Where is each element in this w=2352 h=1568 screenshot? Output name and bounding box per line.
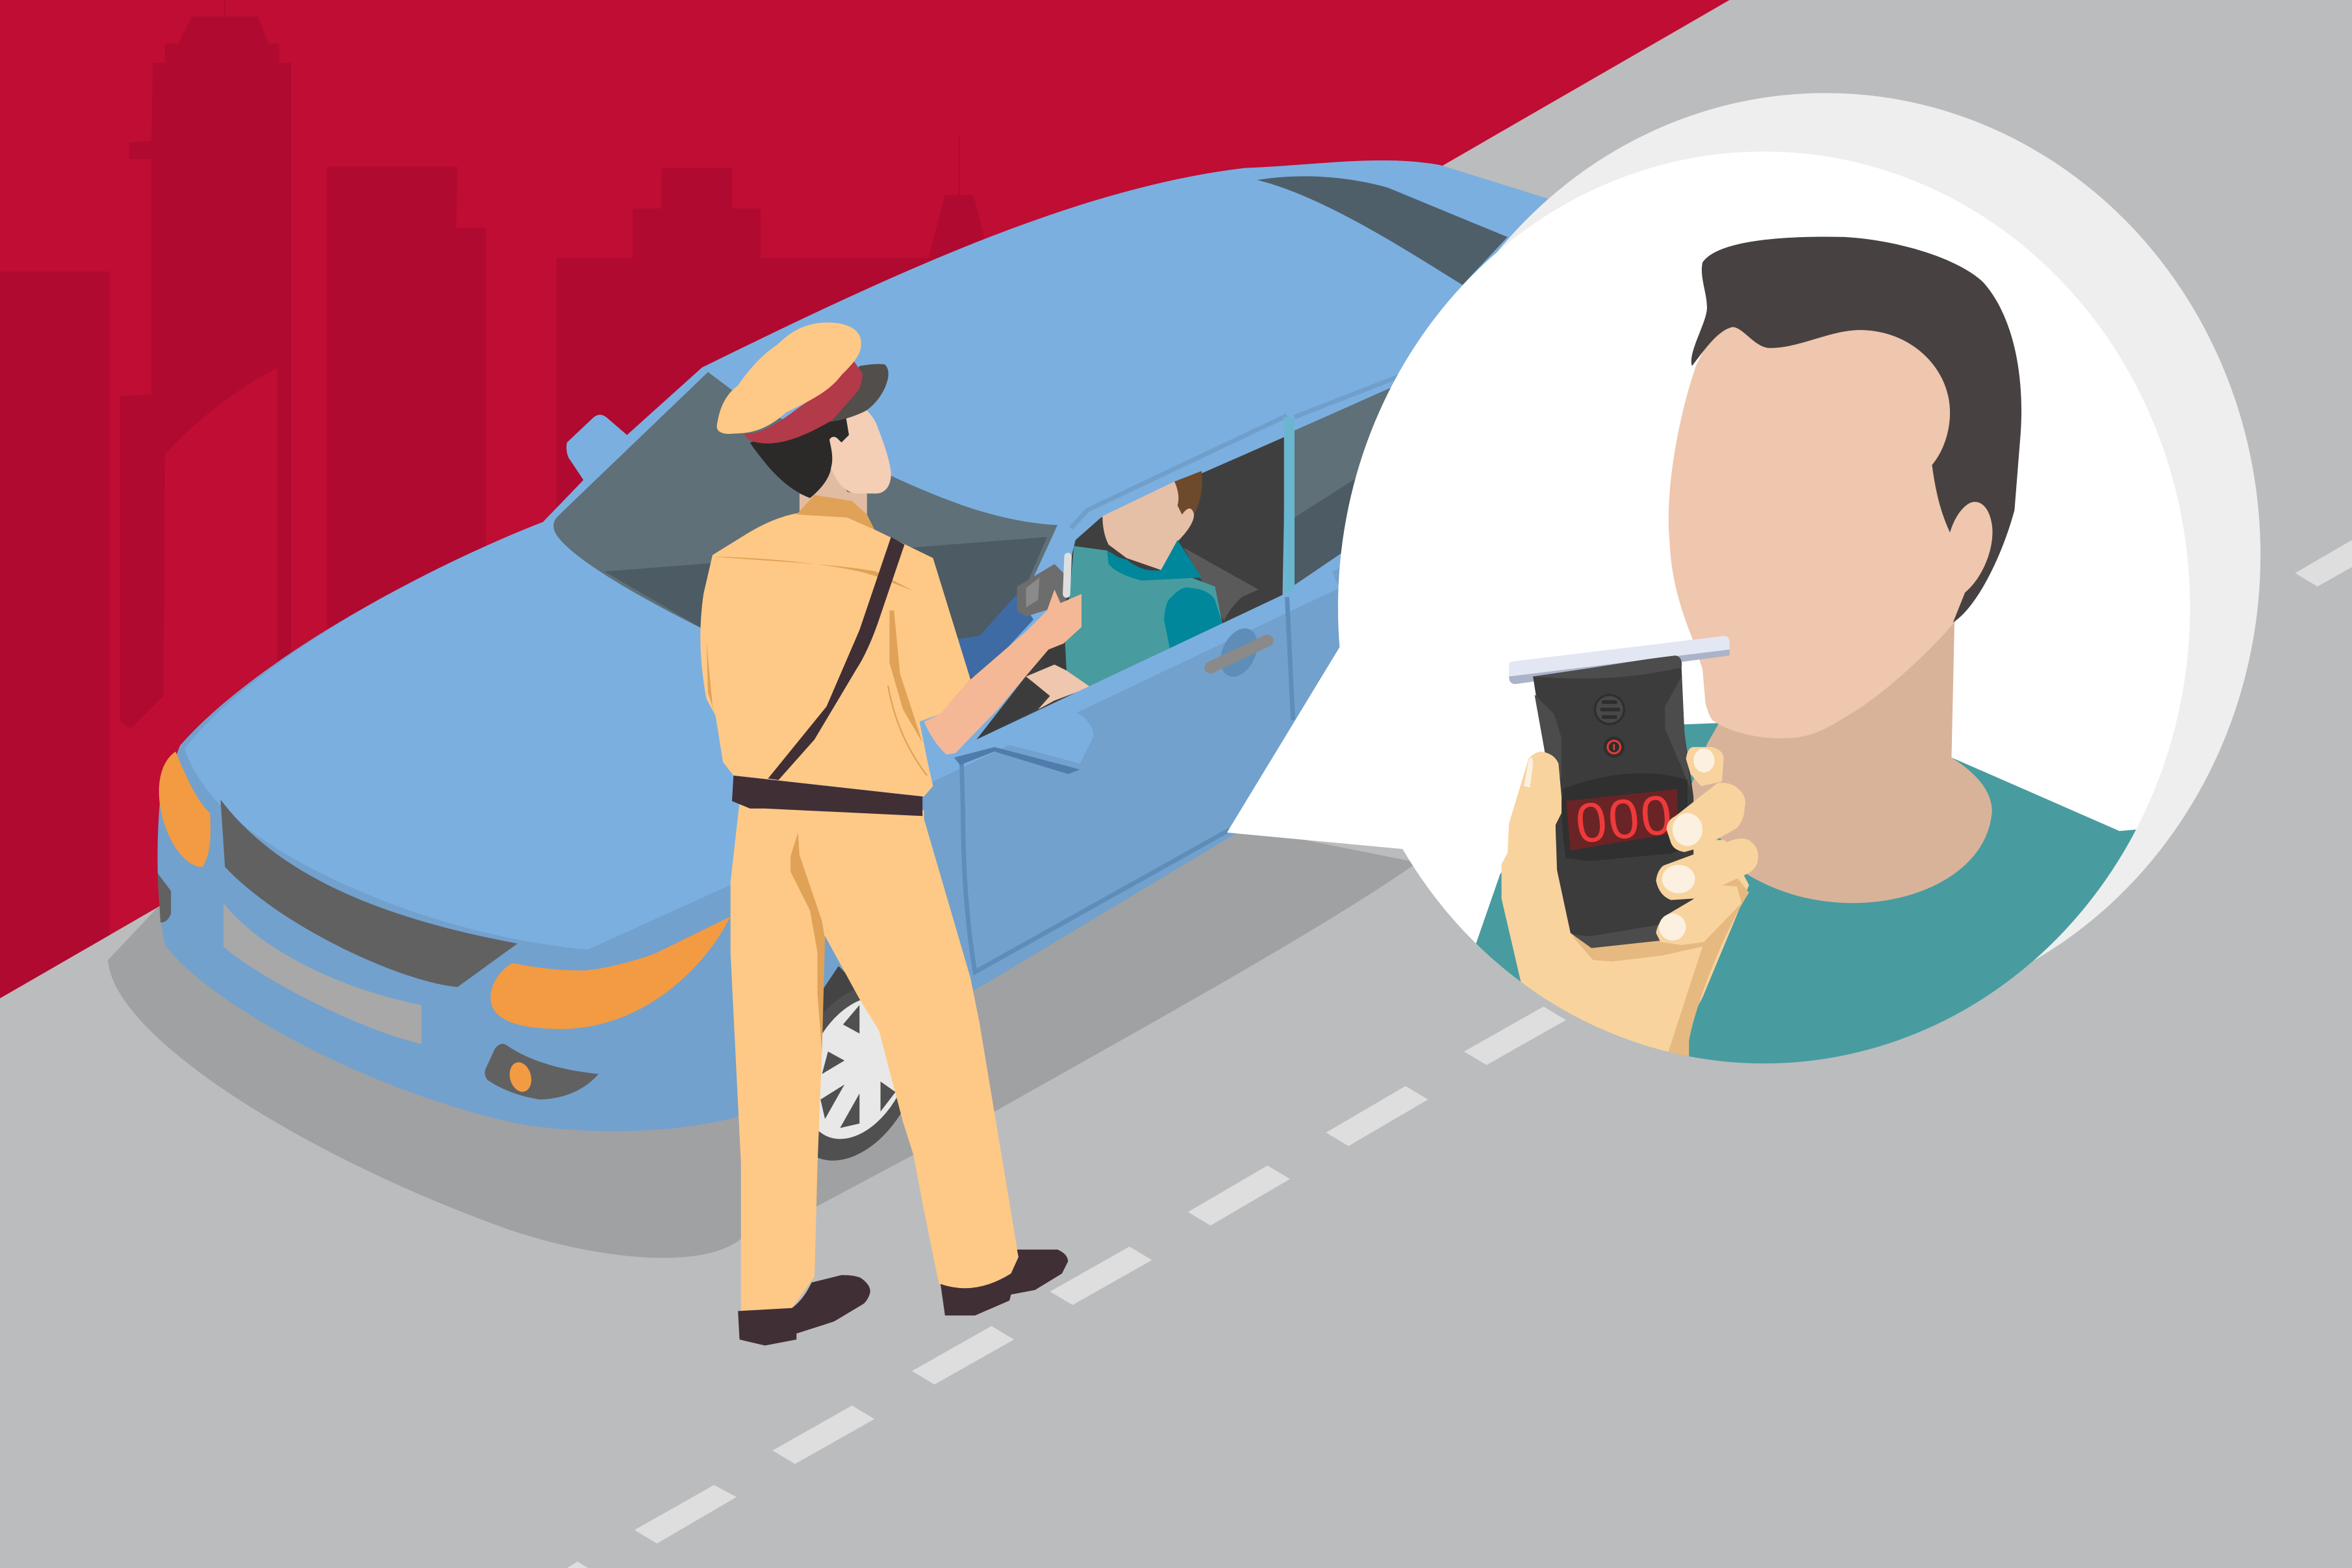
window pillar <box>1284 417 1295 600</box>
window sill strip <box>924 572 1339 786</box>
driver hand <box>1026 664 1091 709</box>
breathalyser <box>1533 655 1693 948</box>
skyline buildings <box>0 0 987 1022</box>
device side grips <box>1533 655 1691 789</box>
face <box>1669 307 2010 739</box>
display reading: 000 <box>1573 784 1675 855</box>
blue car <box>157 160 1560 1182</box>
officer face <box>829 408 891 494</box>
side marker <box>157 873 171 922</box>
shirt collar <box>796 495 874 529</box>
left headlight <box>159 752 210 867</box>
neck <box>800 468 867 518</box>
left shoe <box>738 1275 870 1345</box>
shoulder strap <box>768 537 905 780</box>
belt <box>732 776 922 816</box>
number plate <box>223 903 422 1044</box>
car interior blue <box>957 594 1033 677</box>
side mirror <box>954 713 1093 774</box>
third finger <box>1656 839 1758 900</box>
windshield lower shade <box>605 537 1047 705</box>
thumb <box>1508 752 1562 885</box>
traffic officer <box>700 323 1081 1345</box>
red sky with city skyline <box>0 0 1730 1022</box>
officer hair <box>750 417 849 498</box>
shirt <box>700 513 970 796</box>
fourth finger <box>1656 885 1741 945</box>
index finger <box>1686 747 1724 786</box>
driver face <box>1102 481 1194 570</box>
door window frame lines <box>1071 375 1402 528</box>
display screen <box>1566 789 1678 850</box>
neck <box>1688 622 1992 903</box>
bubble shadow <box>1391 93 2260 1017</box>
teal shirt <box>1476 723 2136 1064</box>
windshield <box>553 372 1057 705</box>
driver <box>976 471 1259 740</box>
grille <box>220 800 518 987</box>
trouser fold <box>790 833 825 1052</box>
door handle <box>1211 622 1267 683</box>
driver sleeve <box>1164 587 1222 650</box>
hand palm <box>1502 840 1749 1065</box>
front wheel <box>761 963 949 1182</box>
mouthpiece tube <box>1509 636 1730 684</box>
cap band <box>744 359 863 444</box>
bubble tail <box>1227 630 1500 900</box>
right headlight <box>490 917 731 1029</box>
device lower lip <box>1571 925 1660 948</box>
driver seat <box>1183 548 1259 621</box>
driver shirt <box>1065 546 1222 687</box>
hood and roof light surfaces <box>184 160 1560 950</box>
device body <box>1533 655 1693 948</box>
shirt folds <box>707 557 927 776</box>
lighter gap inside skyline <box>164 368 277 696</box>
handheld device <box>1017 564 1067 616</box>
speech bubble <box>1227 93 2260 1063</box>
cap crown <box>717 323 861 434</box>
rear window <box>1257 176 1508 285</box>
driver collar <box>1107 540 1202 581</box>
hair <box>1691 237 2021 622</box>
right shoe <box>941 1250 1068 1315</box>
second finger <box>1667 783 1745 852</box>
hand and wrist shadow <box>1573 878 1749 1065</box>
door seam lines <box>961 597 1293 972</box>
display surround <box>1562 773 1688 861</box>
steering wheel <box>976 679 1050 740</box>
rear side window <box>1295 383 1402 585</box>
officer arm and hand <box>924 590 1081 755</box>
speaker grille <box>1594 694 1625 726</box>
car shadow <box>108 825 1417 1258</box>
road centre dashes <box>567 540 2352 1568</box>
device mouthpiece <box>1067 557 1068 594</box>
bubble circle <box>1338 151 2190 1063</box>
power button <box>1604 737 1625 757</box>
fingers <box>1656 747 1758 945</box>
door panel <box>924 588 1350 998</box>
trousers <box>731 803 1018 1311</box>
side window interior <box>976 436 1285 740</box>
cap <box>717 323 889 444</box>
man blowing into breathalyser <box>1455 237 2160 1080</box>
driver hair <box>1167 471 1202 540</box>
car body <box>158 160 1560 1132</box>
fog light <box>485 1044 598 1100</box>
cap brim <box>810 364 889 422</box>
